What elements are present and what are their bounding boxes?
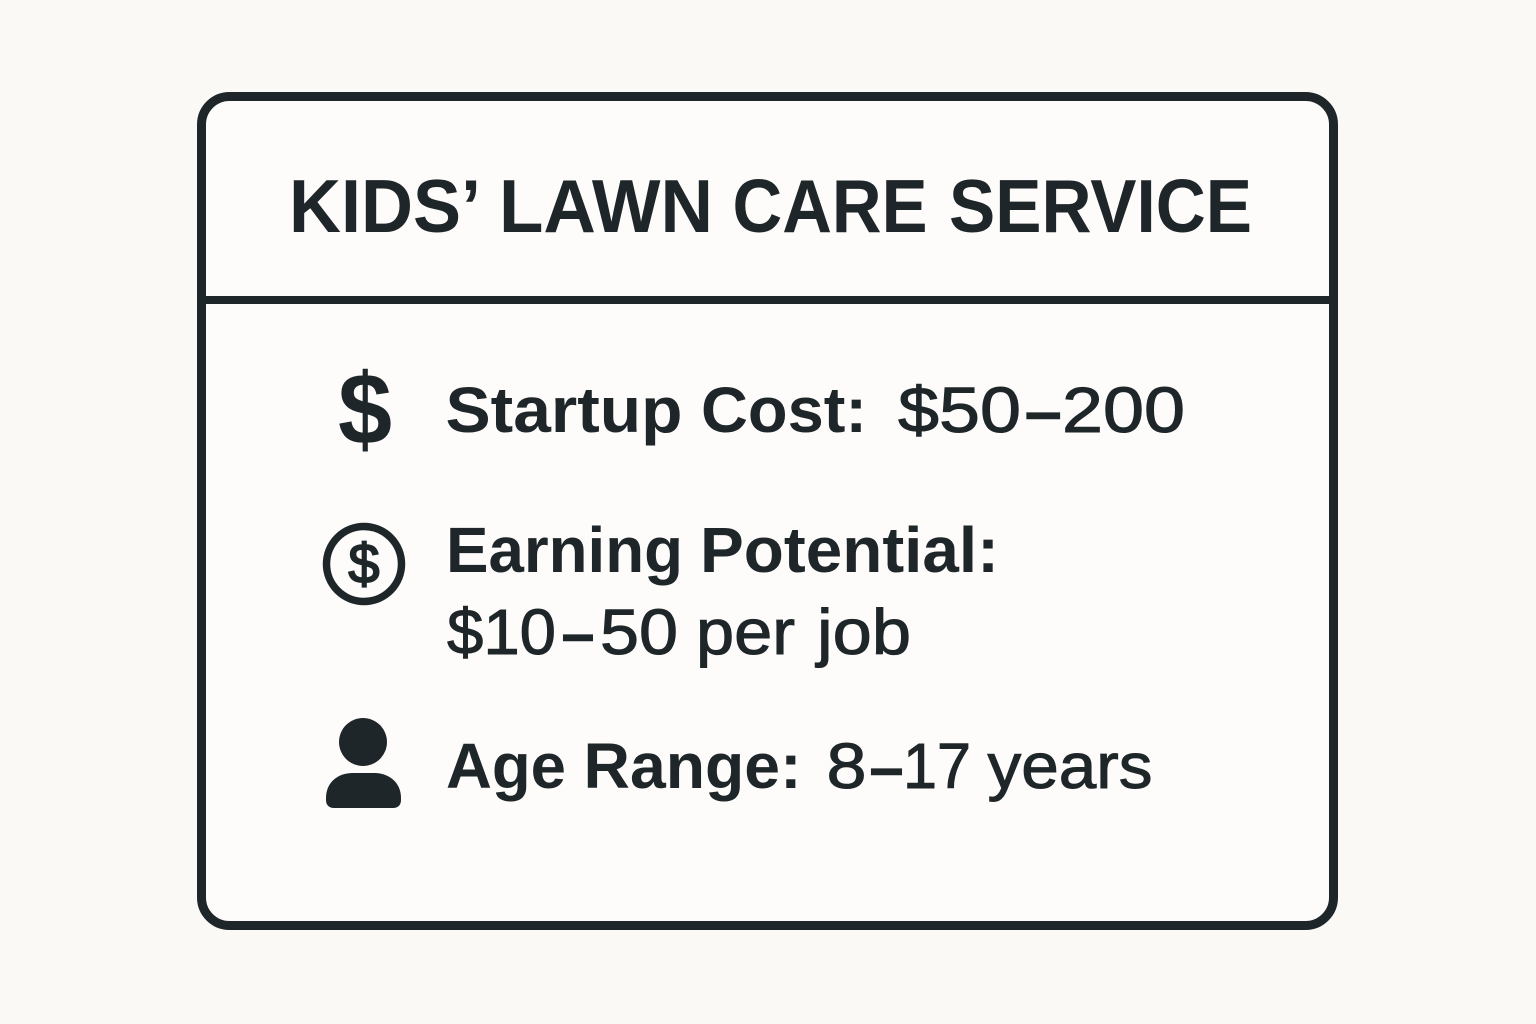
- earning potential row: –: [564, 596, 592, 668]
- startup cost row: $50: [898, 374, 1021, 446]
- earning potential row: job: [815, 596, 911, 668]
- earning potential row: $10: [447, 596, 556, 668]
- age range row: 8: [826, 730, 866, 802]
- title: CARE: [732, 164, 928, 248]
- age range row: years: [988, 730, 1152, 802]
- age range row: 17: [903, 730, 971, 802]
- icon: person: [326, 718, 401, 808]
- startup cost row: Startup: [446, 374, 682, 446]
- earning potential row: 50: [600, 596, 678, 668]
- earning potential row: [446, 514, 999, 668]
- title: LAWN: [499, 164, 713, 248]
- panel: service card: [202, 96, 1334, 926]
- icon: dollar sign: $: [338, 354, 392, 466]
- age range row: Age: [446, 730, 566, 802]
- startup cost row: [446, 374, 1185, 446]
- title: KIDS’: [289, 164, 481, 248]
- earning potential row: Earning: [446, 514, 683, 586]
- startup cost row: Cost:: [701, 374, 867, 446]
- startup cost row: 200: [1062, 374, 1185, 446]
- title: SERVICE: [949, 164, 1252, 248]
- icon: dollar coin: $: [348, 532, 380, 595]
- age range row: [446, 730, 1152, 802]
- icon: dollar coin: [326, 526, 402, 602]
- age range row: –: [872, 730, 901, 802]
- title: [289, 164, 1252, 248]
- earning potential row: per: [696, 596, 795, 668]
- earning potential row: Potential:: [700, 514, 999, 586]
- age range row: Range:: [584, 730, 802, 802]
- startup cost row: –: [1028, 374, 1059, 446]
